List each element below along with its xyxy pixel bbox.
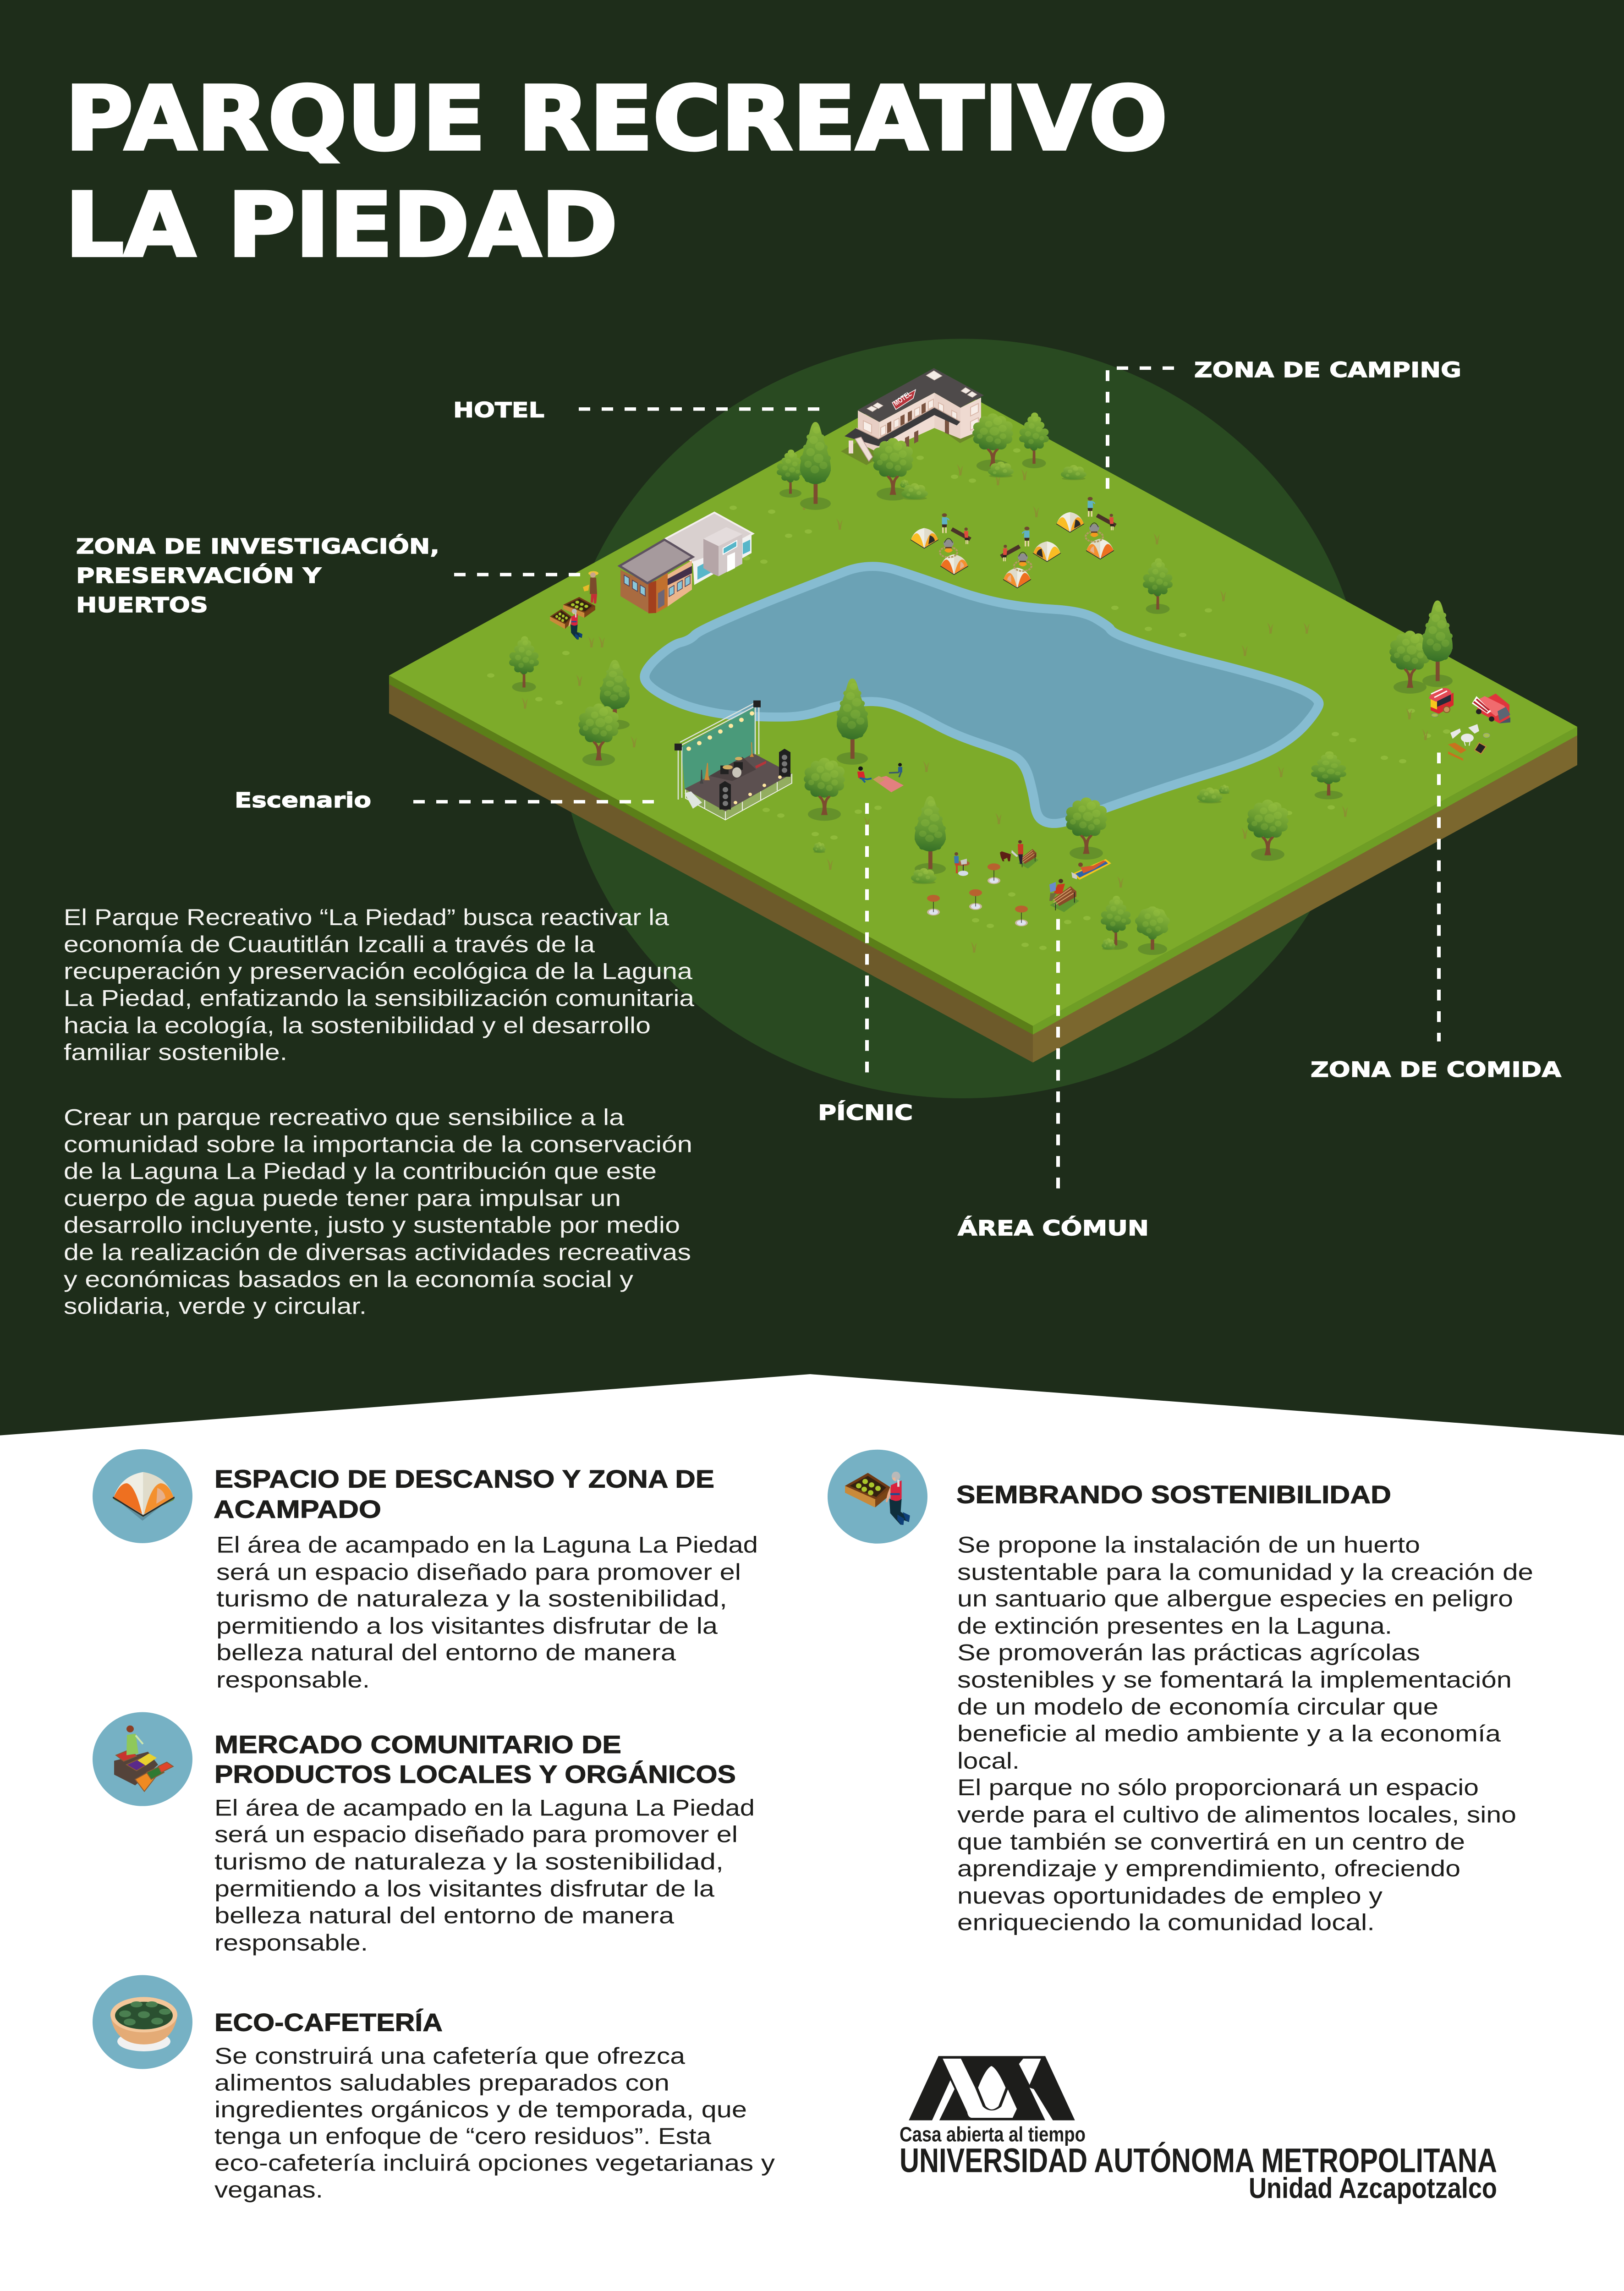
motel roof bbox=[858, 368, 984, 422]
body text: de un modelo de economía circular que bbox=[957, 1694, 1438, 1720]
picnic bbox=[857, 763, 904, 792]
stage stairs bbox=[685, 791, 702, 809]
stage lights row bbox=[686, 711, 782, 804]
hotel bbox=[841, 368, 984, 465]
body text: permitiendo a los visitantes disfrutar de la bbox=[216, 1613, 718, 1639]
icon: planter and gardener bbox=[828, 1450, 927, 1544]
section: community market bbox=[93, 1712, 755, 1955]
objective paragraph: cuerpo de agua puede tener para impulsar un bbox=[64, 1185, 621, 1211]
trees behind hotel zone bbox=[777, 412, 1086, 510]
labels bbox=[76, 358, 1561, 1240]
title: PARQUE RECREATIVO bbox=[65, 67, 1168, 170]
body text: sostenibles y se fomentará la implementación bbox=[957, 1666, 1512, 1693]
grass tufts bbox=[521, 464, 1428, 953]
intro paragraph: El Parque Recreativo “La Piedad” busca reactivar la bbox=[64, 904, 669, 930]
picnic person in red bbox=[857, 767, 872, 782]
objective paragraph: solidaria, verde y circular. bbox=[64, 1293, 367, 1319]
body text: eco-cafetería incluirá opciones vegetarianas y bbox=[214, 2150, 775, 2176]
tree-hidden first floor windows bbox=[905, 430, 918, 449]
body text: será un espacio diseñado para promover el bbox=[214, 1821, 738, 1847]
food area bbox=[1429, 688, 1510, 761]
objective paragraph: y económicas basados en la economía social y bbox=[64, 1266, 633, 1292]
label: research zone: HUERTOS bbox=[76, 593, 208, 617]
body text: verde para el cultivo de alimentos locales, sino bbox=[957, 1802, 1516, 1827]
line: food zone bbox=[1437, 753, 1441, 1041]
garden plots and gardeners bbox=[550, 571, 598, 640]
section: sowing sustainability bbox=[828, 1450, 1533, 1935]
balcony bbox=[845, 407, 960, 446]
label: picnic: PÍCNIC bbox=[818, 1101, 913, 1125]
line: common area bbox=[1056, 919, 1060, 1197]
common area trees bbox=[911, 751, 1346, 955]
campus name: Unidad Azcapotzalco bbox=[1249, 2172, 1497, 2204]
research building bbox=[620, 513, 753, 614]
campers bbox=[942, 497, 1115, 561]
heading: ACAMPADO bbox=[214, 1495, 381, 1523]
picnic person in blue bbox=[889, 763, 902, 777]
leader lines bbox=[413, 368, 1439, 1197]
common area furniture and people bbox=[927, 840, 1111, 926]
body text: El área de acampado en la Laguna La Piedad bbox=[214, 1795, 755, 1820]
section: eco cafe bbox=[93, 1975, 775, 2203]
body text: turismo de naturaleza y la sostenibilidad, bbox=[216, 1586, 727, 1611]
objective paragraph: de la Laguna La Piedad y la contribución que este bbox=[64, 1158, 657, 1184]
heading: PRODUCTOS LOCALES Y ORGÁNICOS bbox=[214, 1760, 736, 1788]
dark green circle behind the park bbox=[559, 339, 1366, 1098]
body text: nuevas oportunidades de empleo y bbox=[957, 1883, 1383, 1908]
heading bbox=[214, 1731, 736, 1788]
sunbather on towel bbox=[1071, 859, 1111, 880]
line: research bbox=[454, 573, 580, 576]
stage rail bbox=[686, 774, 792, 820]
body text: un santuario que albergue especies en peligro bbox=[957, 1586, 1513, 1611]
body text: Se promoverán las prácticas agrícolas bbox=[957, 1639, 1420, 1665]
drum riser and kit bbox=[709, 757, 756, 781]
icon: market stall bbox=[93, 1712, 192, 1806]
body text: permitiendo a los visitantes disfrutar de la bbox=[214, 1876, 714, 1902]
campfires bbox=[940, 523, 1103, 571]
body text bbox=[957, 1532, 1533, 1935]
body text: alimentos saludables preparados con bbox=[214, 2070, 669, 2095]
body text: que también se convertirá en un centro de bbox=[957, 1829, 1465, 1854]
cafe tables and sign bbox=[1448, 724, 1490, 761]
heading: MERCADO COMUNITARIO DE bbox=[214, 1731, 621, 1759]
mid-park trees bbox=[509, 558, 1173, 766]
body text: local. bbox=[957, 1748, 1020, 1773]
body text bbox=[214, 1795, 755, 1955]
title: LA PIEDAD bbox=[65, 174, 618, 276]
keyboard bbox=[755, 761, 766, 768]
label: research zone: ZONA DE INVESTIGACIÓN, bbox=[76, 534, 439, 559]
university logo bbox=[900, 2056, 1497, 2204]
body text: será un espacio diseñado para promover el bbox=[216, 1559, 741, 1584]
body text: ingredientes orgánicos y de temporada, que bbox=[214, 2096, 747, 2122]
label: stage: Escenario bbox=[235, 788, 371, 812]
body text bbox=[216, 1532, 758, 1693]
objective paragraph: comunidad sobre la importancia de la conservación bbox=[64, 1131, 692, 1157]
body text: El parque no sólo proporcionará un espacio bbox=[957, 1775, 1479, 1800]
isometric park map bbox=[389, 368, 1577, 1197]
body text: aprendizaje y emprendimiento, ofreciendo bbox=[957, 1855, 1460, 1881]
guitars bbox=[704, 742, 754, 780]
body text: sustentable para la comunidad y la creación de bbox=[957, 1559, 1533, 1584]
stage bbox=[675, 701, 792, 820]
body text: veganas. bbox=[214, 2176, 323, 2203]
picnic trees bbox=[804, 679, 946, 874]
line: hotel bbox=[579, 407, 819, 411]
doors bbox=[887, 403, 949, 437]
label: hotel: HOTEL bbox=[453, 398, 544, 422]
gardener with watering can bbox=[583, 571, 598, 603]
label: research zone bbox=[76, 534, 439, 617]
objective paragraph: desarrollo incluyente, justo y sustentable por medio bbox=[64, 1212, 680, 1238]
lawn surface bbox=[389, 376, 1577, 1026]
stage skirt bbox=[685, 789, 725, 820]
title bbox=[65, 67, 1168, 276]
line: picnic bbox=[865, 803, 869, 1083]
icon: bowl bbox=[93, 1975, 192, 2069]
objective paragraph: de la realización de diversas actividades recreativas bbox=[64, 1239, 691, 1265]
body text: turismo de naturaleza y la sostenibilidad, bbox=[214, 1848, 724, 1874]
body text: de extinción presentes en la Laguna. bbox=[957, 1613, 1392, 1639]
stage deck bbox=[685, 753, 792, 811]
bench with laptop user and dog bbox=[1000, 840, 1038, 869]
body text: Se propone la instalación de un huerto bbox=[957, 1532, 1420, 1557]
lake bbox=[640, 562, 1324, 828]
logo mark bbox=[909, 2056, 1075, 2120]
lawn spots bbox=[487, 448, 1450, 950]
tents bbox=[911, 512, 1114, 588]
motel sign bbox=[892, 389, 916, 410]
line: stage bbox=[413, 800, 654, 804]
section: camping rest area bbox=[93, 1449, 758, 1693]
label: camping: ZONA DE CAMPING bbox=[1194, 358, 1461, 382]
rooftop units bbox=[867, 371, 977, 411]
body text: responsable. bbox=[214, 1929, 368, 1955]
body text bbox=[214, 2043, 775, 2203]
body text: El área de acampado en la Laguna La Piedad bbox=[216, 1532, 758, 1557]
person at table bbox=[954, 852, 970, 876]
body text: tenga un enfoque de “cero residuos”. Esta bbox=[214, 2123, 711, 2149]
truss frame bbox=[678, 702, 759, 800]
objective paragraph bbox=[64, 1104, 692, 1319]
speakers bbox=[719, 749, 790, 810]
motel sign: MOTEL bbox=[892, 390, 913, 407]
body text: enriqueciendo la comunidad local. bbox=[957, 1909, 1375, 1935]
food truck bbox=[1472, 694, 1510, 723]
building windows bbox=[624, 575, 690, 597]
label: research zone: PRESERVACIÓN Y bbox=[76, 564, 322, 588]
body text: belleza natural del entorno de manera bbox=[214, 1902, 674, 1928]
bench with bearded man bbox=[1049, 879, 1079, 912]
windows bbox=[863, 399, 978, 436]
body text: beneficie al medio ambiente y a la economía bbox=[957, 1721, 1501, 1746]
intro paragraph: familiar sostenible. bbox=[64, 1039, 287, 1065]
food cart bbox=[1429, 688, 1454, 717]
line: camping bbox=[1108, 368, 1174, 489]
white lower section bbox=[0, 1374, 1624, 2291]
body text: belleza natural del entorno de manera bbox=[216, 1639, 676, 1665]
heading bbox=[214, 1465, 714, 1523]
intro paragraph bbox=[64, 904, 694, 1065]
logo tagline: Casa abierta al tiempo bbox=[900, 2123, 1086, 2146]
stairs bbox=[855, 437, 872, 461]
intro paragraph: recuperación y preservación ecológica de la Laguna bbox=[64, 958, 692, 984]
body text: Se construirá una cafetería que ofrezca bbox=[214, 2043, 685, 2069]
objective paragraph: Crear un parque recreativo que sensibilice a la bbox=[64, 1104, 624, 1130]
backdrop bbox=[681, 707, 755, 789]
body text: responsable. bbox=[216, 1666, 370, 1693]
label: food zone: ZONA DE COMIDA bbox=[1311, 1058, 1561, 1082]
intro paragraph: hacia la ecología, la sostenibilidad y el desarrollo bbox=[64, 1012, 651, 1038]
heading: SEMBRANDO SOSTENIBILIDAD bbox=[956, 1480, 1391, 1508]
camping area bbox=[911, 497, 1115, 588]
heading: ECO-CAFETERÍA bbox=[214, 2008, 443, 2036]
intro paragraph: economía de Cuautitlán Izcalli a través de la bbox=[64, 932, 595, 957]
far corner trees bbox=[1389, 600, 1453, 694]
soil block bbox=[389, 675, 1577, 1063]
heading: ESPACIO DE DESCANSO Y ZONA DE bbox=[214, 1465, 714, 1493]
icon: tent bbox=[93, 1449, 192, 1543]
intro paragraph: La Piedad, enfatizando la sensibilización comunitaria bbox=[64, 985, 694, 1011]
label: common area: ÁREA CÓMUN bbox=[958, 1216, 1149, 1240]
